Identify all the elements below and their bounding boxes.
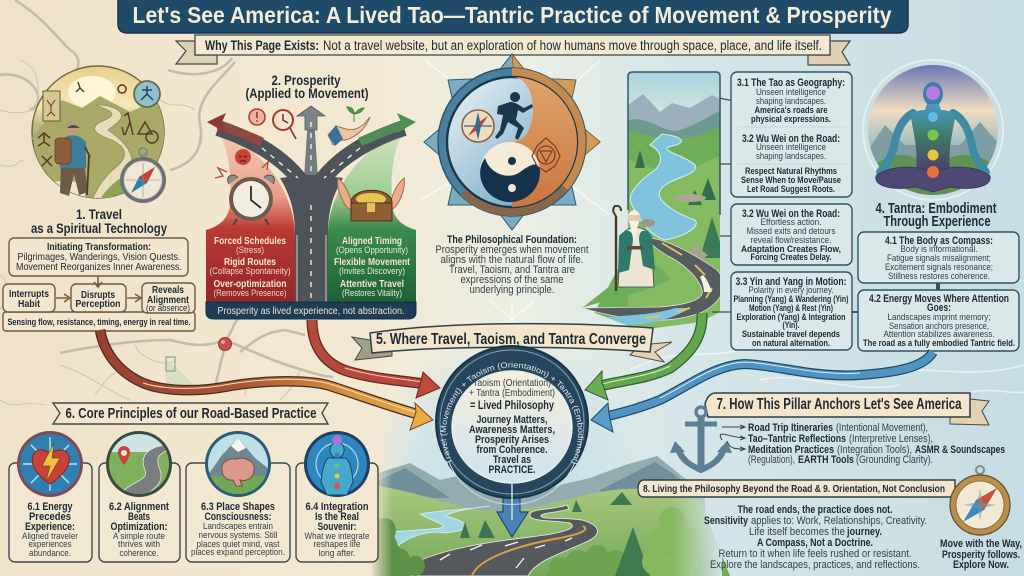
box: 3.1 and 3.2: 3.2 Wu Wei on the Road: (742, 133, 840, 145)
icon: anchor (670, 407, 745, 470)
connector brackets (712, 98, 731, 312)
arrow: red from prosperity (312, 320, 440, 398)
panel: 3 tao boxes (712, 72, 852, 350)
icon: rune glyphs (38, 82, 158, 166)
panel: 7 pillar anchors (670, 393, 1005, 470)
icon: chakra body (304, 431, 370, 497)
lower left trees (368, 518, 425, 576)
circle text: + Tantra (Embodiment) (469, 388, 555, 399)
card: 6.3 place shapes: Landscapes entrain (203, 521, 273, 532)
green text: Aligned Timing (342, 235, 402, 247)
text: philosophical foundation: expressions of the same (460, 274, 564, 286)
box: 4.1 body as compass: Body is informational. (900, 244, 978, 255)
circle text: Prosperity Arises (475, 434, 549, 446)
right fade (672, 470, 722, 576)
text: the road ends: Return to it when life feels rushed or resistant. (718, 548, 912, 560)
text: move with the way (940, 538, 1022, 571)
box: 3.3 yin and yang: (Yin). (782, 320, 800, 330)
card: 6.3 place shapes: places expand perception. (191, 547, 285, 558)
card: 6.4 integration: Souvenir: (318, 521, 356, 533)
lower right trees (545, 545, 640, 576)
panel: tao landscape card (582, 72, 725, 330)
icon: compass (120, 148, 166, 203)
flow: interrupts, disrupts, reveals: Habit (18, 298, 40, 310)
card: 6.2 alignment: Beats (128, 511, 150, 523)
icon: treasure chest with hands (338, 178, 404, 221)
flow: interrupts, disrupts, reveals: Alignment (147, 294, 189, 306)
convergence circle (435, 345, 589, 538)
card: 6.4 integration: reshapes life (314, 539, 360, 550)
circle text: Journey Matters, (476, 414, 548, 426)
heading: prosperity: 2. Prosperity (272, 72, 341, 88)
list: pillar links: EARTH Tools (798, 454, 854, 466)
card: 6.4 integration: Is the Real (315, 511, 359, 523)
box: 3.2 effortless action: reveal flow/resistance. (750, 235, 832, 246)
text: move with the way: Explore Now. (953, 559, 1009, 571)
list: pillar links: Tao–Tantric Reflections (748, 433, 846, 445)
text: philosophical foundation: Prosperity emerges when movement (436, 244, 588, 256)
box: 3.1 and 3.2: Sense When to Move/Pause (741, 175, 841, 186)
text: philosophical foundation: The Philosophical Foundation: (447, 234, 577, 246)
road centre line (472, 526, 585, 576)
text box: initiating transformation (9, 238, 188, 276)
card: 6.4 integration (296, 431, 378, 562)
circle text: = Lived Philosophy (470, 398, 554, 412)
panel: 2 prosperity (206, 72, 416, 319)
left fade (370, 440, 392, 576)
flow: interrupts, disrupts, reveals: (or absence) (146, 303, 190, 313)
arrow: blue from tantra (591, 352, 933, 432)
panel: 8 and 9 living the philosophy (638, 466, 1022, 571)
red text (210, 235, 290, 298)
card: 6.3 place shapes: Consciousness: (204, 511, 272, 523)
box: 3.1 and 3.2: physical expressions. (751, 114, 831, 125)
list: pillar links: (Grounding Clarity). (856, 454, 933, 466)
banner: core principles (53, 403, 328, 424)
subtitle ribbon: why this page exists: Not a travel website, but an exploration of how humans move through space, place, and life itself. (323, 38, 822, 53)
list: pillar links: (Regulation), (748, 454, 795, 466)
box: 4.2 energy moves: Goes: (927, 302, 951, 314)
panel: 6 core principles (9, 403, 378, 562)
icon: warning, magnifier clock (249, 109, 296, 139)
green text: Flexible Movement (334, 256, 410, 268)
white rays around emblem (420, 60, 1024, 395)
green text: (Invites Discovery) (339, 266, 405, 276)
card: 6.3 place shapes: places quiet mind, vast (196, 539, 280, 550)
circle text: Taoism (Orientation) (473, 378, 551, 389)
box: 3.1 and 3.2: Unseen intelligence (756, 142, 826, 153)
list: pillar links (748, 422, 1005, 466)
green text (334, 235, 410, 298)
box: 4.2 energy moves (858, 290, 1019, 351)
list: pillar links: Meditation Practices (748, 444, 834, 456)
red text: (Stress) (236, 245, 264, 255)
red text: (Removes Presence) (214, 288, 286, 298)
card: 6.2 alignment: A simple route (113, 531, 165, 542)
text: the road ends: journey. (846, 526, 882, 538)
banner: living the philosophy: 8. Living the Philosophy Beyond the Road & 9. Orientation, Not Conclusion (643, 483, 945, 495)
flow: interrupts, disrupts, reveals: Perception (76, 298, 120, 310)
icon: teal badge (134, 81, 160, 107)
subtitle ribbon: why this page exists: Why This Page Exists: (205, 38, 319, 53)
arrow: long red to orange (100, 330, 433, 430)
panel: 2 prosperity: (Applied to Movement) (246, 85, 368, 101)
river (378, 506, 490, 548)
road (395, 505, 598, 576)
box: 3.3 yin and yang: 3.3 Yin and Yang in Motion: (736, 276, 846, 288)
card: 6.3 place shapes: nervous systems. Still (198, 530, 278, 541)
box: 3.2 effortless action: Forcing Creates Delay. (750, 252, 832, 263)
circle text: Awareness Matters, (469, 424, 555, 436)
banner: 5 where travel, taoism, and tantra converge: 5. Where Travel, Taoism, and Tantra Converge (376, 331, 646, 348)
text: the road ends: Explore the landscapes, practices, and reflections. (710, 559, 920, 571)
red text: Forced Schedules (214, 235, 286, 247)
red text: (Collapse Spontaneity) (210, 266, 290, 276)
ring text: Travel (Movement) + Taoism (Orientation) + Tantra (Embodiment) (440, 362, 584, 465)
panel: philosophical foundation (424, 54, 600, 296)
box: 3.3 yin and yang: Exploration (Yang) & Integration (736, 312, 846, 322)
text box: initiating transformation: Pilgrimages, Wanderings, Vision Quests. (18, 251, 180, 263)
red text: Over-optimization (214, 278, 286, 290)
card: 6.1 energy: abundance. (29, 548, 71, 559)
text: the road ends: The road ends, the practice does not. (738, 504, 892, 516)
box: 3.2 effortless action (731, 204, 852, 265)
flow: interrupts, disrupts, reveals (3, 276, 195, 331)
card: 6.2 alignment: 6.2 Alignment (109, 501, 169, 513)
card: 6.3 place shapes: 6.3 Place Shapes (201, 501, 275, 513)
box: 3.2 effortless action: Effortless action. (760, 217, 822, 228)
box: 3.2 effortless action: 3.2 Wu Wei on the Road: (742, 208, 840, 220)
box: 4.1 body as compass: Stillness restores coherence. (888, 271, 990, 282)
icon: brain and mountains (205, 431, 275, 500)
emblem: yin yang compass (424, 54, 600, 230)
road fork (207, 106, 416, 318)
icon: hiker (55, 124, 90, 196)
card: 6.4 integration: long after. (318, 548, 356, 559)
text: philosophical foundation (436, 234, 588, 296)
flow: interrupts, disrupts, reveals: Interrupts (9, 288, 49, 300)
text: philosophical foundation: Travel, Taoism, and Tantra are (449, 264, 575, 276)
banner: living the philosophy (638, 480, 955, 497)
prosperity strip: Prosperity as lived experience, not abstraction. (218, 306, 404, 317)
box: 3.3 yin and yang: Sustainable travel depends (742, 329, 840, 340)
card: 6.2 alignment (99, 430, 180, 562)
text box: initiating transformation: Initiating Transformation: (47, 241, 151, 253)
dog on road (700, 275, 712, 292)
bottom landscape (340, 330, 730, 576)
box: 3.1 and 3.2: Unseen intelligence (756, 87, 826, 98)
card: 6.2 alignment: Optimization: (110, 521, 168, 533)
box: 4.2 energy moves: Sensation anchors presence, (889, 321, 989, 332)
sky wash (340, 330, 685, 505)
box: 3.3 yin and yang: Planning (Yang) & Wandering (Yin) (734, 294, 848, 304)
text: philosophical foundation: aligns with the natural flow of life. (440, 254, 584, 266)
box: 3.1 and 3.2: Respect Natural Rhythms (745, 166, 837, 177)
box: 4.1 body as compass: Excitement signals resonance; (885, 262, 993, 273)
banner: how this pillar anchors (705, 393, 989, 425)
illustration: hiker circle (3, 66, 195, 331)
card: 6.2 alignment: coherence. (120, 548, 158, 559)
box: 3.1 and 3.2: shaping landscapes. (756, 96, 826, 107)
box: 3.2 effortless action: Missed exits and detours (746, 226, 836, 237)
text: the road ends: applies to: Work, Relationships, Creativity. (751, 515, 927, 527)
box: 3.3 yin and yang: Motion (Yang) & Rest (Yin) (749, 303, 833, 313)
green text: (Restores Vitality) (342, 288, 402, 298)
card: 6.4 integration: 6.4 Integration (306, 501, 368, 513)
icon: chakra mandala (532, 138, 560, 172)
card: 6.1 energy (9, 431, 92, 562)
box: 3.1 and 3.2: 3.1 The Tao as Geography: (737, 77, 845, 89)
card: 6.3 place shapes (186, 431, 290, 562)
icon: alarm clock (215, 149, 274, 225)
box: 3.2 effortless action: Adaptation Creates Flow, (741, 244, 841, 255)
text: the road ends (704, 504, 927, 571)
green text: Attentive Travel (340, 278, 404, 290)
box: 3.1 and 3.2: America's roads are (754, 105, 828, 116)
banner: core principles: 6. Core Principles of our Road-Based Practice (66, 406, 316, 422)
box: 4.1 body as compass: 4.1 The Body as Compass: (885, 235, 993, 247)
circle text: from Coherence. (476, 444, 548, 456)
box: 4.2 energy moves: Landscapes imprint memory; (888, 312, 990, 323)
icon: hand with sprout (328, 107, 370, 146)
box: 4.1 body as compass (858, 232, 1019, 283)
card: 6.1 energy: Precedes (29, 511, 71, 523)
card: 6.1 energy: 6.1 Energy (28, 501, 72, 513)
title: Let's See America: A Lived Tao—Tantric Practice of Movement & Prosperity (132, 2, 892, 28)
meditator figure (876, 82, 990, 192)
icon: compass in emblem (462, 110, 494, 142)
map roads background (0, 0, 333, 405)
box: 3.1 and 3.2 (731, 72, 852, 197)
icon: large compass (950, 466, 1010, 535)
green path panel (328, 130, 416, 302)
subtitle ribbon: why this page exists (176, 35, 850, 65)
panel: 4 tantra (852, 60, 1019, 351)
list: pillar links: (Intentional Movement), (836, 422, 928, 434)
title banner (118, 0, 908, 33)
box: 3.1 and 3.2: shaping landscapes. (756, 151, 826, 162)
icon: heart with lightning (17, 431, 83, 497)
down arrow (497, 490, 528, 537)
banner: 5 where travel, taoism, and tantra converge (352, 324, 672, 362)
prosperity strip (206, 302, 416, 319)
card: 6.1 energy: experiences (28, 539, 72, 550)
arrow: green from tao (585, 313, 702, 400)
sage illustration (582, 206, 670, 308)
icon: scroll (43, 91, 60, 121)
green text: (Opens Opportunity) (336, 245, 408, 255)
text box: initiating transformation: Movement Reorganizes Inner Awareness. (16, 261, 182, 273)
flow: interrupts, disrupts, reveals: Sensing flow, resistance, timing, energy in real time. (8, 317, 190, 327)
box: 3.3 yin and yang: Polarity in every journey. (748, 285, 834, 296)
circle text: Travel as (493, 454, 531, 466)
map pin (218, 338, 232, 350)
circle text (469, 378, 555, 476)
card: 6.4 integration: What we integrate (304, 531, 370, 542)
card: 6.2 alignment: thrives with (118, 539, 160, 550)
flow: interrupts, disrupts, reveals: Disrupts (81, 289, 115, 301)
list: pillar links: (Integration Tools), (837, 444, 912, 456)
card: 6.1 energy: Experience: (25, 521, 75, 533)
box: 3.1 and 3.2: Let Road Suggest Roots. (747, 184, 835, 195)
card: 6.1 energy: Aligned traveler (22, 531, 79, 542)
heading: 1 travel: 1. Travel (76, 206, 122, 222)
list: pillar links: (Interpretive Lenses), (849, 433, 933, 445)
illustration: meditator (863, 60, 1003, 200)
red path panel (206, 130, 295, 302)
distant mountains (372, 456, 705, 540)
text: philosophical foundation: underlying principle. (470, 284, 554, 296)
box: 4.1 body as compass: Fatigue signals misalignment; (887, 253, 991, 264)
text: the road ends: Sensitivity (704, 515, 749, 527)
flow: interrupts, disrupts, reveals: Reveals (152, 284, 184, 296)
box: 4.2 energy moves: Attention stabilizes awareness. (884, 329, 994, 340)
red text: Rigid Routes (224, 256, 276, 268)
illustration: hiker circle: as a Spiritual Technology (31, 220, 167, 236)
text: the road ends: Life itself becomes the (749, 526, 845, 538)
list: pillar links: Road Trip Itineraries (748, 422, 833, 434)
icon: road and pin (105, 430, 175, 497)
box: 3.3 yin and yang (731, 272, 852, 350)
icon: runner (495, 92, 533, 140)
green hills (372, 485, 730, 576)
box: 3.3 yin and yang: on natural alternation. (752, 338, 830, 349)
circle text: PRACTICE. (488, 464, 536, 476)
panel: 4 tantra: Through Experience (884, 214, 990, 230)
text: the road ends: A Compass, Not a Doctrine. (757, 537, 873, 549)
